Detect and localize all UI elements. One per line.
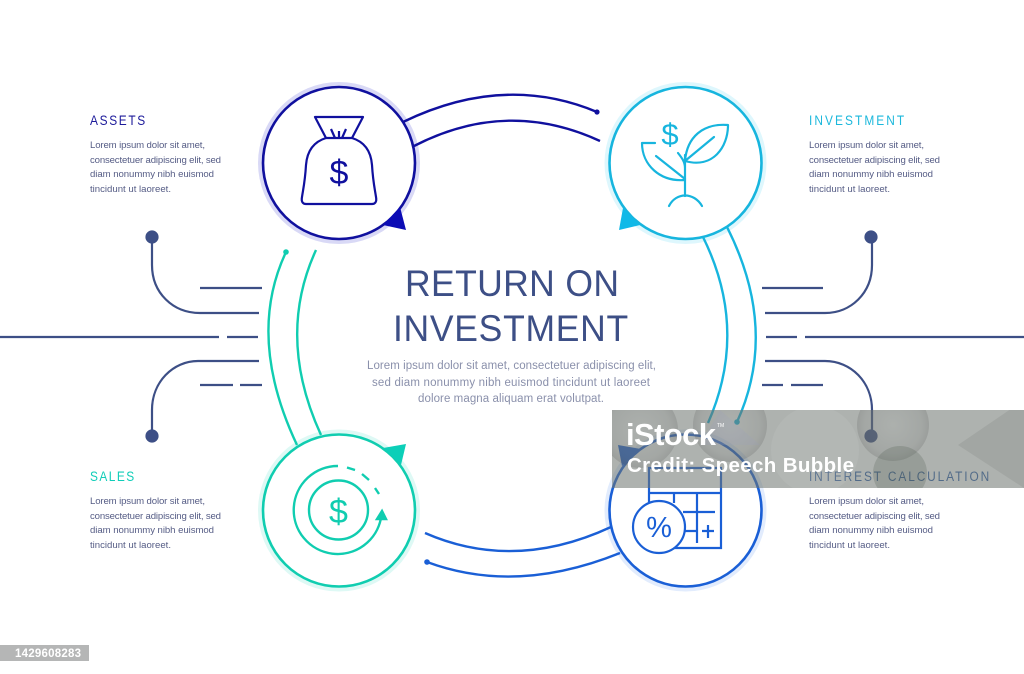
left connector lines <box>0 230 262 443</box>
text block: assets: consectetuer adipiscing elit, sed <box>90 155 221 166</box>
watermark banner: Credit: Speech Bubble <box>627 454 854 477</box>
text block: investment: consectetuer adipiscing elit, sed <box>809 155 940 166</box>
text block: sales: Lorem ipsum dolor sit amet, <box>90 496 205 507</box>
node: investment with plant icon <box>610 87 762 239</box>
arrow arcs: assets to investment <box>403 95 600 146</box>
arrow arcs: sales to assets <box>268 249 321 445</box>
icon: money bag <box>302 117 376 204</box>
central description: dolore magna aliquam erat volutpat. <box>418 393 604 405</box>
text block: assets: diam nonummy nibh euismod <box>90 169 214 180</box>
title: RETURN ON <box>405 262 619 304</box>
text block: investment: Lorem ipsum dolor sit amet, <box>809 140 924 151</box>
title: INVESTMENT <box>393 307 628 349</box>
text block: assets: Lorem ipsum dolor sit amet, <box>90 140 205 151</box>
text block: assets <box>90 112 221 195</box>
text block: sales: diam nonummy nibh euismod <box>90 525 214 536</box>
text block: sales: consectetuer adipiscing elit, sed <box>90 511 221 522</box>
central description: Lorem ipsum dolor sit amet, consectetuer adipiscing elit, <box>367 360 656 372</box>
text block: interest calculation: Lorem ipsum dolor sit amet, <box>809 496 924 507</box>
text block: assets: ASSETS <box>90 112 146 128</box>
icon: table and percent badge <box>633 468 721 553</box>
icon: plant with dollar: $ <box>661 117 679 152</box>
watermark banner: TM <box>717 423 724 429</box>
text block: interest calculation <box>809 468 989 551</box>
watermark banner <box>612 410 1024 488</box>
text block: interest calculation: diam nonummy nibh euismod <box>809 525 933 536</box>
icon: coin with circular arrow <box>294 466 386 554</box>
text block: interest calculation: tincidunt ut laoreet. <box>809 540 890 551</box>
right connector lines <box>762 230 1024 443</box>
node: interest calculation with calculator icon <box>610 434 762 586</box>
text block: interest calculation: consectetuer adipiscing elit, sed <box>809 511 940 522</box>
text block: investment <box>809 112 940 195</box>
text block: investment: tincidunt ut laoreet. <box>809 184 890 195</box>
icon: table and percent badge: % <box>646 512 672 544</box>
icon: plant with dollar <box>642 117 728 206</box>
central description <box>367 360 656 405</box>
arrow arcs: investment to interest calculation <box>703 227 756 425</box>
watermark banner: iStock <box>626 417 717 452</box>
text block: sales: tincidunt ut laoreet. <box>90 540 171 551</box>
text block: investment: diam nonummy nibh euismod <box>809 169 933 180</box>
text block: sales <box>90 468 221 551</box>
icon: coin with circular arrow: $ <box>329 493 348 531</box>
text block: investment: INVESTMENT <box>809 112 904 128</box>
circle halos <box>258 82 766 592</box>
title <box>393 262 628 349</box>
stock id tag <box>0 645 89 661</box>
central description: sed diam nonummy nibh euismod tincidunt ut laoreet <box>372 377 651 389</box>
text block: interest calculation: INTEREST CALCULATION <box>809 468 989 484</box>
text block: assets: tincidunt ut laoreet. <box>90 184 171 195</box>
node: assets with money bag icon <box>263 87 415 239</box>
icon: money bag: $ <box>330 154 349 192</box>
node: sales with coin cycle icon <box>263 434 415 586</box>
arrow arcs: interest calculation to sales <box>424 527 620 577</box>
stock id tag: 1429608283 <box>15 648 81 660</box>
text block: sales: SALES <box>90 468 135 484</box>
